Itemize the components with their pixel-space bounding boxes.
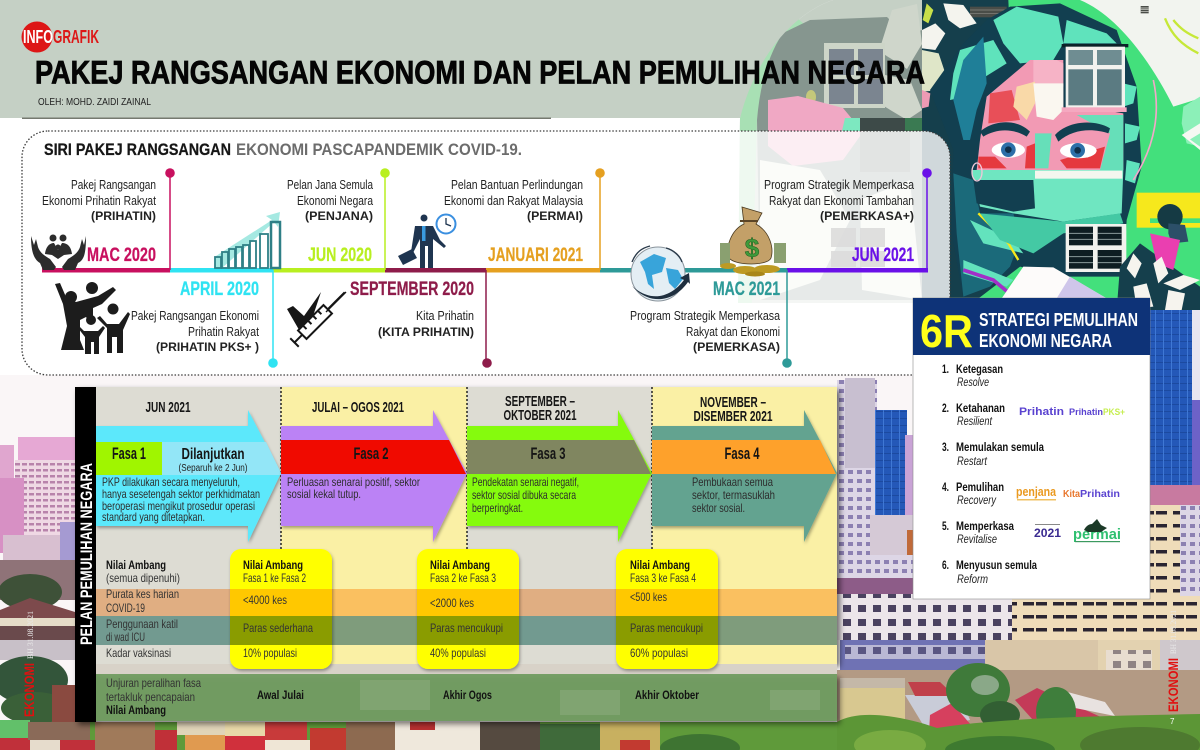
arrow: Fasa 1: Dilanjutkan bbox=[182, 446, 244, 463]
threshold card: Fasa 3 ke Fasa 4: 60% populasi bbox=[630, 646, 688, 660]
row labels: COVID-19 bbox=[106, 601, 145, 615]
list item 5: Memperkasa bbox=[956, 519, 1014, 533]
threshold card: Fasa 2 ke Fasa 3: Nilai Ambang bbox=[430, 558, 490, 572]
milestone: April 2020: Pakej Rangsangan Ekonomi bbox=[131, 309, 259, 323]
icon: caring hands and family bbox=[31, 234, 86, 270]
milestone: Januari 2021: Ekonomi dan Rakyat Malaysia bbox=[444, 194, 583, 208]
logos: Belanjawan 2021 and Permai bbox=[1034, 519, 1121, 543]
threshold card: Fasa 2 ke Fasa 3: Paras mencukupi bbox=[430, 621, 503, 635]
panel: 6R strategy bbox=[913, 298, 1150, 599]
arrow: Fasa 4: Fasa 4 bbox=[724, 444, 760, 463]
list item 4: Recovery bbox=[957, 493, 997, 507]
arrow: Fasa 1 bbox=[96, 410, 281, 542]
list item 3: Restart bbox=[957, 454, 988, 468]
milestone: April 2020: (PRIHATIN PKS+ ) bbox=[156, 342, 259, 354]
icon: globe bbox=[631, 246, 690, 301]
row labels: Kadar vaksinasi bbox=[106, 646, 171, 660]
milestone: Jun 2021 bbox=[764, 178, 914, 266]
threshold card: Fasa 3 ke Fasa 4: Paras mencukupi bbox=[630, 621, 703, 635]
icon: family group bbox=[55, 282, 130, 354]
heading: November Disember 2021: DISEMBER 2021 bbox=[694, 408, 772, 425]
list item 6: 6. bbox=[942, 558, 949, 572]
icon: growth chart bbox=[214, 212, 280, 268]
forecast row: Awal Julai bbox=[257, 688, 304, 702]
milestone: Jun 2020: JUN 2020 bbox=[308, 245, 372, 266]
threshold card: Fasa 1 ke Fasa 2: Nilai Ambang bbox=[243, 558, 303, 572]
byline: OLEH: MOHD. ZAIDI ZAINAL bbox=[38, 97, 151, 108]
logos: Prihatin: Prihatin bbox=[1019, 406, 1064, 418]
threshold card: Fasa 1 ke Fasa 2 bbox=[230, 549, 332, 669]
forecast row: tertakluk pencapaian bbox=[106, 690, 195, 704]
list item 3 bbox=[942, 440, 1044, 468]
arrow: Fasa 4: sektor, termasuklah bbox=[692, 488, 775, 502]
list item 1: Resolve bbox=[957, 375, 989, 389]
arrow: Fasa 3: Pendekatan senarai negatif, bbox=[472, 475, 579, 489]
threshold card: Fasa 2 ke Fasa 3: Fasa 2 ke Fasa 3 bbox=[430, 571, 496, 585]
heading: Jun 2021: JUN 2021 bbox=[146, 399, 190, 416]
row labels: Purata kes harian bbox=[106, 587, 179, 601]
milestone: Januari 2021: Pelan Bantuan Perlindungan bbox=[451, 178, 583, 192]
logos: Penjana and Kita Prihatin bbox=[1016, 484, 1120, 500]
page tag: right: BH 31.08.2021 bbox=[1169, 610, 1178, 654]
milestone: Jun 2021: (PEMERKASA+) bbox=[820, 211, 914, 223]
list item 4: Pemulihan bbox=[956, 480, 1004, 494]
list item 5 bbox=[942, 519, 1014, 546]
threshold card: Fasa 2 ke Fasa 3: <2000 kes bbox=[430, 596, 474, 610]
arrow: Fasa 2: sosial kekal tutup. bbox=[287, 487, 361, 501]
list item 4: 4. bbox=[942, 480, 949, 494]
milestone: Jun 2020: (PENJANA) bbox=[305, 211, 373, 223]
page tag: right bbox=[1165, 610, 1181, 726]
threshold card: Fasa 1 ke Fasa 2: Paras sederhana bbox=[243, 621, 313, 635]
forecast row: Unjuran peralihan fasa bbox=[106, 676, 201, 690]
row labels: Nilai Ambang bbox=[106, 558, 166, 572]
timeline line and markers bbox=[42, 168, 932, 368]
milestone: Mac 2020: MAC 2020 bbox=[87, 245, 156, 266]
heading: 6R: 6R bbox=[920, 305, 973, 357]
arrow: Fasa 2: Fasa 2 bbox=[354, 444, 388, 463]
arrow: Fasa 3: sektor sosial dibuka secara bbox=[472, 488, 576, 502]
threshold card: Fasa 2 ke Fasa 3 bbox=[417, 549, 519, 669]
row labels: Penggunaan katil bbox=[106, 617, 178, 631]
threshold card: Fasa 3 ke Fasa 4 bbox=[616, 549, 718, 669]
list item 5: 5. bbox=[942, 519, 949, 533]
arrow: Fasa 4: sektor sosial. bbox=[692, 501, 745, 515]
milestone: Mac 2020 bbox=[42, 178, 156, 266]
milestone: Mac 2020: Pakej Rangsangan bbox=[71, 178, 156, 192]
icon: money bag bbox=[720, 207, 786, 276]
milestone: Mac 2021: Rakyat dan Ekonomi bbox=[686, 325, 780, 339]
arrow: Fasa 1: Fasa 1 bbox=[112, 444, 146, 463]
logos: Penjana and Kita Prihatin: Kita bbox=[1063, 489, 1080, 500]
threshold card: Fasa 1 ke Fasa 2: <4000 kes bbox=[243, 593, 287, 607]
milestone: Jun 2021: Program Strategik Memperkasa bbox=[764, 178, 914, 192]
icon: money bag: $ bbox=[745, 233, 760, 263]
milestone: Januari 2021 bbox=[444, 178, 583, 266]
list item 4 bbox=[942, 480, 1004, 507]
page tag: left: BH 31.08.2021 bbox=[26, 611, 35, 659]
heading: strategy title: EKONOMI NEGARA bbox=[979, 331, 1112, 351]
milestone: Jun 2021: Rakyat dan Ekonomi Tambahan bbox=[769, 194, 914, 208]
panel: recovery plan bbox=[75, 387, 837, 722]
heading: stimulus series: EKONOMI PASCAPANDEMIK COVID-19. bbox=[236, 140, 522, 159]
infographic badge: GRAFIK bbox=[53, 27, 99, 47]
arrow: Fasa 3: berperingkat. bbox=[472, 501, 523, 515]
list item 1 bbox=[942, 362, 1003, 389]
milestone: Januari 2021: (PERMAI) bbox=[527, 211, 583, 223]
milestone: Mac 2021 bbox=[630, 279, 780, 354]
arrow: Fasa 1: hanya sesetengah sektor perkhidmatan bbox=[102, 487, 260, 501]
icon: businessman with clock bbox=[398, 214, 456, 268]
heading: September Oktober 2021: OKTOBER 2021 bbox=[504, 407, 576, 424]
list item 2: Ketahanan bbox=[956, 401, 1005, 415]
threshold card: Fasa 3 ke Fasa 4: <500 kes bbox=[630, 590, 667, 604]
milestone: Jun 2020: Ekonomi Negara bbox=[297, 194, 373, 208]
threshold card: Fasa 1 ke Fasa 2: Fasa 1 ke Fasa 2 bbox=[243, 571, 306, 585]
milestone: Mac 2021: (PEMERKASA) bbox=[693, 342, 780, 354]
header band bbox=[0, 0, 833, 118]
forecast row: Akhir Ogos bbox=[443, 688, 492, 702]
heading: Julai Ogos 2021: JULAI – OGOS 2021 bbox=[312, 399, 404, 416]
list item 2 bbox=[942, 401, 1005, 428]
milestone: Mac 2021: Program Strategik Memperkasa bbox=[630, 309, 780, 323]
logos: Prihatin: PKS+ bbox=[1103, 407, 1125, 417]
list item 2: 2. bbox=[942, 401, 949, 415]
page tag: left: EKONOMI bbox=[21, 663, 37, 717]
milestone: Mac 2020: (PRIHATIN) bbox=[91, 211, 156, 223]
row labels: di wad ICU bbox=[106, 630, 145, 644]
list item 2: Resilient bbox=[957, 414, 992, 428]
heading: strategy title bbox=[979, 310, 1138, 351]
background: city photo bbox=[0, 300, 1200, 750]
mural: muted section behind header bbox=[738, 0, 922, 303]
page tag: right: 7 bbox=[1170, 717, 1175, 726]
logos: Prihatin: Prihatin bbox=[1069, 407, 1103, 417]
arrow: Fasa 1: (Separuh ke 2 Jun) bbox=[178, 463, 248, 474]
list item 3: Memulakan semula bbox=[956, 440, 1044, 454]
logos: Prihatin bbox=[1019, 406, 1125, 418]
icon: syringe and check mark bbox=[287, 288, 349, 347]
heading: September Oktober 2021: SEPTEMBER – bbox=[505, 393, 575, 410]
heading: stimulus series: SIRI PAKEJ RANGSANGAN bbox=[44, 140, 231, 159]
forecast row bbox=[106, 676, 699, 717]
milestone: Mac 2020: Ekonomi Prihatin Rakyat bbox=[42, 194, 156, 208]
arrow: Fasa 1: PKP dilakukan secara menyeluruh, bbox=[102, 475, 240, 489]
arrow: Fasa 3: Fasa 3 bbox=[530, 444, 566, 463]
milestone: April 2020 bbox=[131, 279, 259, 354]
list item 6 bbox=[942, 558, 1037, 586]
heading: November Disember 2021 bbox=[694, 394, 772, 425]
infographic badge bbox=[22, 22, 99, 52]
threshold bands bbox=[96, 589, 837, 645]
row labels: (semua dipenuhi) bbox=[106, 571, 180, 585]
milestone: September 2020: SEPTEMBER 2020 bbox=[350, 279, 474, 300]
logos: Penjana and Kita Prihatin: Prihatin bbox=[1080, 489, 1120, 500]
row labels bbox=[106, 558, 180, 660]
milestone: September 2020: (KITA PRIHATIN) bbox=[378, 327, 474, 339]
arrow: Fasa 2: Perluasan senarai positif, sektor bbox=[287, 475, 420, 489]
milestone: Januari 2021: JANUARI 2021 bbox=[488, 245, 583, 266]
vertical label: PELAN PEMULIHAN NEGARA bbox=[77, 463, 96, 645]
milestone: September 2020: Kita Prihatin bbox=[416, 309, 474, 323]
mural: masked woman bbox=[922, 0, 1200, 310]
milestone: Mac 2021: MAC 2021 bbox=[713, 279, 780, 300]
list item 3: 3. bbox=[942, 440, 949, 454]
heading: November Disember 2021: NOVEMBER – bbox=[700, 394, 766, 411]
threshold card: Fasa 1 ke Fasa 2: 10% populasi bbox=[243, 646, 297, 660]
arrow: Fasa 1: beroperasi mengikut prosedur operasi bbox=[102, 499, 255, 513]
panel: stimulus timeline bbox=[22, 131, 950, 375]
logos: Belanjawan 2021 and Permai: 2021 bbox=[1034, 526, 1061, 540]
milestone: Jun 2020: Pelan Jana Semula bbox=[287, 178, 373, 192]
milestone: September 2020 bbox=[350, 279, 474, 339]
logos: Penjana and Kita Prihatin: penjana bbox=[1016, 484, 1057, 499]
arrow: Fasa 1: standard yang ditetapkan. bbox=[102, 510, 205, 524]
arrow: Fasa 4 bbox=[652, 410, 837, 542]
list item 1: 1. bbox=[942, 362, 949, 376]
list item 6: Menyusun semula bbox=[956, 558, 1037, 572]
list item 6: Reform bbox=[957, 572, 988, 586]
threshold card: Fasa 2 ke Fasa 3: 40% populasi bbox=[430, 646, 486, 660]
list item 1: Ketegasan bbox=[956, 362, 1003, 376]
heading: stimulus series bbox=[44, 140, 522, 159]
milestone: Jun 2021: JUN 2021 bbox=[852, 245, 914, 266]
title: PAKEJ RANGSANGAN EKONOMI DAN PELAN PEMULIHAN NEGARA bbox=[35, 54, 925, 90]
milestone: April 2020: Prihatin Rakyat bbox=[188, 325, 259, 339]
threshold card: Fasa 3 ke Fasa 4: Fasa 3 ke Fasa 4 bbox=[630, 571, 696, 585]
logos: Belanjawan 2021 and Permai: permai bbox=[1073, 526, 1121, 543]
page tag: left bbox=[21, 611, 37, 717]
arrow: Fasa 3 bbox=[467, 410, 652, 542]
page tag: right: EKONOMI bbox=[1165, 658, 1181, 712]
arrow: Fasa 4: Pembukaan semua bbox=[692, 475, 773, 489]
forecast row: Nilai Ambang bbox=[106, 703, 166, 717]
list item 5: Revitalise bbox=[957, 532, 997, 546]
heading: strategy title: STRATEGI PEMULIHAN bbox=[979, 310, 1138, 330]
milestone: Jun 2020 bbox=[287, 178, 373, 266]
threshold card: Fasa 3 ke Fasa 4: Nilai Ambang bbox=[630, 558, 690, 572]
milestone: April 2020: APRIL 2020 bbox=[180, 279, 259, 300]
forecast row: Akhir Oktober bbox=[635, 688, 699, 702]
heading: September Oktober 2021 bbox=[504, 393, 576, 424]
arrow: Fasa 2 bbox=[281, 410, 467, 542]
infographic badge: INFO bbox=[23, 27, 53, 47]
